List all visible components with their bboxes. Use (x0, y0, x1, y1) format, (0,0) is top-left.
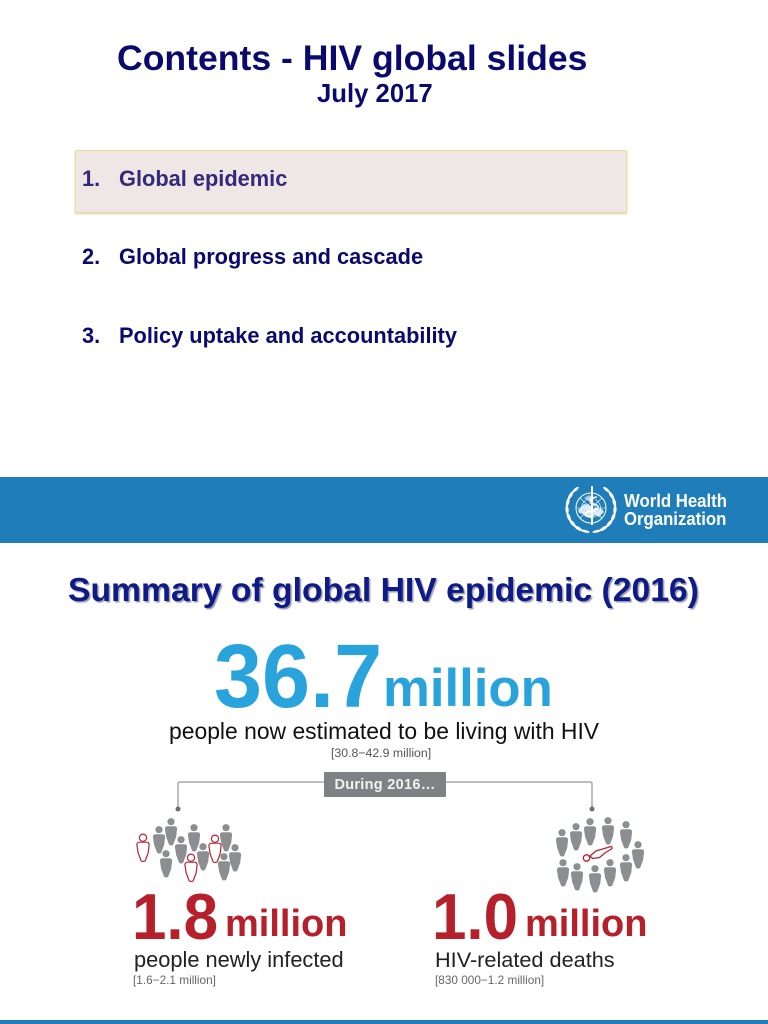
WHO wordmark (624, 490, 727, 529)
stat: 1.8 million (132, 881, 347, 953)
badge: During 2016: During 2016… (334, 777, 436, 793)
WHO wordmark: Organization (624, 508, 726, 529)
highlighted list item 1 (75, 150, 627, 213)
icon: crowd with newly infected people (136, 818, 242, 882)
title: Contents - HIV global slides (117, 38, 587, 78)
bottom blue strip (0, 1020, 768, 1024)
item 1 text: 1. (82, 166, 100, 191)
WHO wordmark: World Health (624, 490, 727, 511)
range: 1.6-2.1 million: [1.6−2.1 million] (133, 973, 216, 987)
icon: crowd around a deceased person (556, 817, 644, 892)
list item 3: Policy uptake and accountability (119, 323, 457, 348)
heading: summary: Summary of global HIV epidemic (2016) (68, 571, 699, 609)
caption: HIV-related deaths: HIV-related deaths (435, 947, 615, 972)
word million: million (383, 659, 553, 718)
item 1 text (82, 166, 287, 191)
range: 30.8-42.9 million: [30.8−42.9 million] (331, 746, 431, 760)
number 1.8: 1.8 (132, 881, 218, 953)
subtitle: date: July 2017 (317, 80, 433, 108)
stat: 1.0 million (432, 881, 647, 953)
word million: million (225, 903, 347, 945)
caption: people newly infected: people newly infected (134, 947, 344, 972)
icon: WHO emblem (565, 486, 617, 533)
headline stat: 36.7 million (214, 627, 553, 727)
highlighted list item 1: Global epidemic (119, 166, 287, 191)
caption: people living with HIV: people now estimated to be living with HIV (169, 718, 599, 744)
badge: During 2016 (324, 772, 446, 797)
number 1.0: 1.0 (432, 881, 518, 953)
connector lines (176, 781, 594, 812)
blue WHO banner (0, 477, 768, 543)
list item 2: Global progress and cascade (119, 244, 423, 269)
list item 3: 3. (82, 323, 100, 348)
number 36.7: 36.7 (214, 627, 382, 727)
word million: million (525, 903, 647, 945)
list item 2: 2. (82, 244, 100, 269)
range: 830 000-1.2 million: [830 000−1.2 million] (435, 973, 544, 987)
